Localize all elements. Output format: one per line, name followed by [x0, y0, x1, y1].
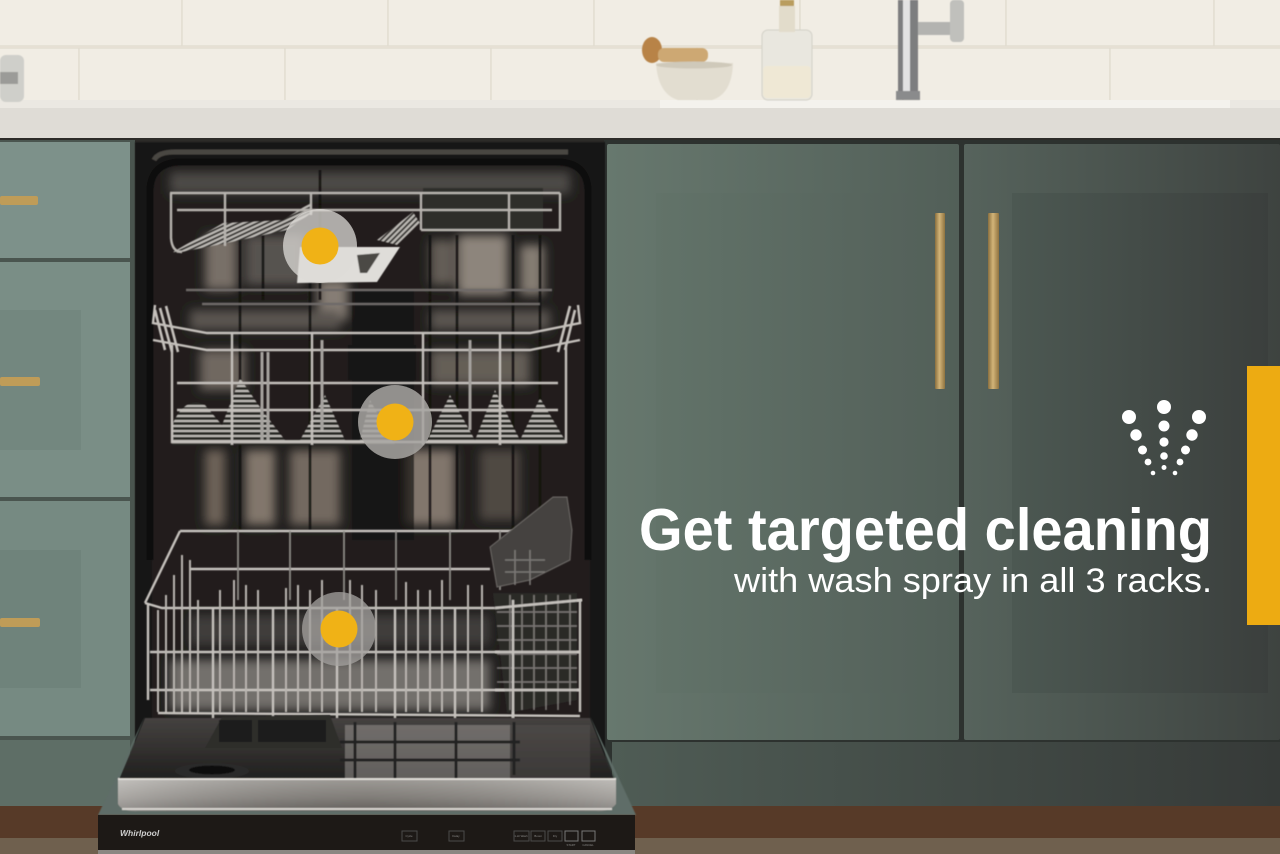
left cabinet drawers [0, 140, 135, 810]
bowl with brush [642, 37, 733, 100]
soap bottle [762, 0, 812, 100]
kitchen wall with tiles [0, 0, 1280, 102]
tub reflections [170, 172, 570, 710]
lower spray marker [302, 592, 376, 666]
yellow accent bar [1247, 366, 1280, 625]
subheading: with wash spray in all 3 racks. [733, 562, 1212, 600]
control panel: CANCEL [582, 843, 594, 847]
drawer pull top [0, 196, 38, 205]
heading: Get targeted cleaning [639, 497, 1212, 563]
door inner tray [98, 716, 636, 815]
filter cover [205, 715, 342, 748]
tub floor [118, 715, 615, 782]
control panel: Delay [452, 834, 460, 838]
control panel: Dry [553, 834, 558, 838]
faucet [896, 0, 964, 100]
right cabinet doors [604, 140, 1280, 810]
door handle right [988, 213, 999, 389]
control panel: Cycle [406, 834, 413, 838]
cycle buttons [402, 831, 595, 841]
floor and rug [0, 806, 1280, 854]
door handle left [935, 213, 945, 389]
dishwasher tub [135, 142, 605, 802]
tub back grid [240, 170, 540, 530]
drain [175, 763, 249, 779]
middle rack [153, 290, 580, 445]
control panel: 1-Hr Wash [514, 834, 528, 838]
brand logo: Whirlpool [120, 828, 160, 838]
upper spray marker [283, 209, 357, 283]
control panel: START [567, 843, 576, 847]
icon: spray dots [1122, 400, 1206, 475]
upper rack tray [297, 247, 400, 283]
control panel: Boost [534, 834, 542, 838]
left glass object [0, 55, 24, 102]
lower rack [145, 531, 582, 765]
countertop [0, 100, 1280, 142]
drawer pull bottom [0, 618, 40, 627]
control panel [98, 815, 635, 854]
silverware basket [490, 497, 582, 730]
upper rack [170, 193, 560, 253]
drawer pull middle [0, 377, 40, 386]
middle spray marker [358, 385, 432, 459]
